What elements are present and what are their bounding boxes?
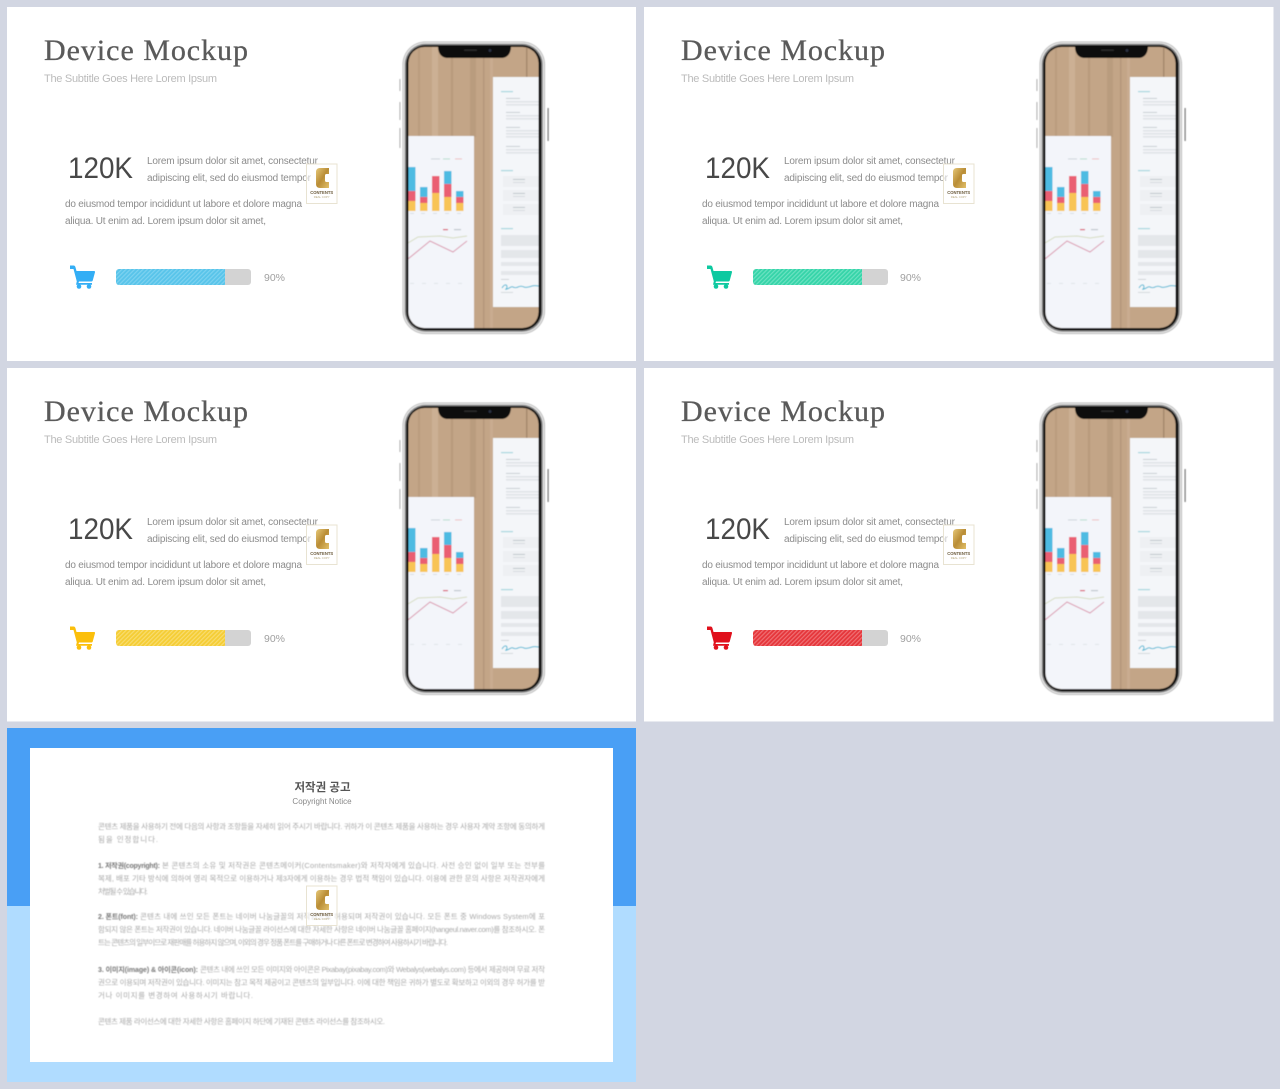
- copyright body text: 함되지 않은 폰트는 저작권이 있습니다. 네이버 나눔글꼴 라이선스에 대한 자세한 사항은 네이버 나눔글꼴 홈페이지(hangeul.naver.com)를 참조하시오. 폰: [98, 924, 545, 934]
- title: Device Mockup: [681, 34, 885, 67]
- body text: [702, 156, 956, 227]
- watermark: REAL COPY: [951, 195, 967, 199]
- statistic: 120K: [705, 513, 770, 546]
- body text: Lorem ipsum dolor sit amet, consectetur: [784, 517, 956, 528]
- watermark: CONTENTS: [310, 190, 333, 195]
- icon: shopping cart: [707, 626, 732, 650]
- body text: Lorem ipsum dolor sit amet, consectetur: [147, 156, 319, 167]
- subtitle: The Subtitle Goes Here Lorem Ipsum: [681, 434, 854, 446]
- copyright heading: 저작권 공고: [294, 780, 351, 794]
- copyright body text: 콘텐츠 내에 쓰인 모든 이미지와 아이콘은 Pixabay(pixabay.com)와 Webalys(webalys.com) 등에서 제공하며 무료 저작: [200, 964, 545, 974]
- body text: adipiscing elit, sed do eiusmod tempor: [784, 173, 949, 184]
- statistic: 120K: [68, 513, 133, 546]
- copyright body text: 3. 이미지(image) & 아이콘(icon):: [98, 965, 198, 974]
- body text: [65, 156, 319, 227]
- watermark: CONTENTS: [947, 190, 970, 195]
- subtitle: The Subtitle Goes Here Lorem Ipsum: [44, 434, 217, 446]
- body text: [65, 517, 319, 588]
- panel: device mockup yellow: [7, 368, 636, 722]
- phone mockup: [400, 402, 549, 695]
- copyright body text: 처벌될 수 있습니다.: [98, 886, 148, 896]
- subtitle: The Subtitle Goes Here Lorem Ipsum: [44, 73, 217, 85]
- phone mockup: [400, 42, 549, 334]
- statistic: 120K: [68, 152, 133, 185]
- panel: device mockup blue: [7, 7, 636, 361]
- subtitle: The Subtitle Goes Here Lorem Ipsum: [681, 73, 854, 85]
- progress bar: [116, 630, 251, 646]
- body text: do eiusmod tempor incididunt ut labore et dolore magna: [65, 199, 302, 210]
- watermark: [944, 525, 974, 564]
- copyright subheading: Copyright Notice: [292, 797, 352, 806]
- title: Device Mockup: [44, 395, 248, 428]
- copyright body text: 콘텐츠 제품 라이선스에 대한 자세한 사항은 홈페이지 하단에 기재된 콘텐츠 라이선스를 참조하시오.: [98, 1016, 385, 1026]
- watermark: CONTENTS: [947, 551, 970, 556]
- body text: adipiscing elit, sed do eiusmod tempor: [147, 534, 312, 545]
- body text: Lorem ipsum dolor sit amet, consectetur: [147, 517, 319, 528]
- copyright body text: [98, 821, 545, 1026]
- body text: do eiusmod tempor incididunt ut labore et dolore magna: [702, 560, 939, 571]
- copyright body text: 거나 이미지를 변경하여 사용하시기 바랍니다.: [98, 990, 253, 1000]
- panel: device mockup green: [644, 7, 1274, 361]
- copyright body text: 본 콘텐츠의 소유 및 저작권은 콘텐츠메이커(Contentsmaker)와 저작자에게 있습니다. 사전 승인 없이 일부 또는 전부를: [162, 860, 545, 870]
- watermark: [944, 164, 974, 204]
- icon: shopping cart: [707, 266, 732, 289]
- progress bar: [753, 630, 888, 646]
- copyright body text: 2. 폰트(font):: [98, 913, 138, 921]
- watermark: [306, 886, 337, 926]
- copyright body text: 콘텐츠 제품을 사용하기 전에 다음의 사항과 조항들을 자세히 읽어 주시기 바랍니다. 귀하가 이 콘텐츠 제품을 사용하는 경우 사용자 계약 조항에 동의하게: [98, 821, 545, 831]
- panel: device mockup red: [644, 368, 1274, 722]
- watermark: [306, 164, 337, 204]
- watermark: CONTENTS: [310, 912, 333, 917]
- copyright body text: 권으로 이용되며 저작권이 있습니다. 이미지는 참고 목적 제공이고 콘텐츠의 일부입니다. 이에 대한 책임은 귀하가 별도로 확보하고 이외의 경우 허가를 받: [98, 977, 545, 987]
- percentage: 90%: [900, 633, 921, 645]
- copyright body text: 복제, 배포 기타 방식에 의하여 영리 목적으로 이용하거나 제3자에게 이용하는 경우 법적 책임이 있습니다. 이용에 관한 문의 사항은 저작권자에게: [98, 873, 545, 883]
- copyright body text: 트는 콘텐츠의 일부이므로 재판매를 허용하지 않으며, 이외의 경우 정품 폰트를 구매하거나 다른 폰트로 변경하여 사용하시기 바랍니다.: [98, 937, 448, 947]
- body text: aliqua. Ut enim ad. Lorem ipsum dolor sit amet,: [702, 577, 903, 588]
- title: Device Mockup: [681, 395, 885, 428]
- copyright body text: 콘텐츠 내에 쓰인 모든 폰트는 네이버 나눔글꼴의 저작권으로 허용되며 저작권이 있습니다. 모든 폰트 중 Windows System에 포: [140, 911, 545, 921]
- phone mockup: [1036, 42, 1186, 334]
- progress bar: [753, 269, 888, 285]
- body text: [702, 517, 956, 588]
- progress bar: [116, 269, 251, 285]
- percentage: 90%: [264, 633, 285, 645]
- watermark: REAL COPY: [314, 195, 330, 199]
- watermark: [306, 525, 337, 564]
- body text: do eiusmod tempor incididunt ut labore et dolore magna: [65, 560, 302, 571]
- body text: adipiscing elit, sed do eiusmod tempor: [147, 173, 312, 184]
- panel: copyright notice: [7, 728, 636, 1082]
- icon: shopping cart: [70, 266, 95, 289]
- watermark: REAL COPY: [951, 556, 967, 560]
- body text: aliqua. Ut enim ad. Lorem ipsum dolor sit amet,: [65, 577, 266, 588]
- body text: adipiscing elit, sed do eiusmod tempor: [784, 534, 949, 545]
- percentage: 90%: [900, 272, 921, 284]
- copyright body text: 1. 저작권(copyright):: [98, 861, 160, 870]
- copyright body text: 됨을 인정합니다.: [98, 834, 158, 844]
- watermark: REAL COPY: [314, 917, 330, 921]
- icon: shopping cart: [70, 626, 95, 650]
- body text: do eiusmod tempor incididunt ut labore et dolore magna: [702, 199, 939, 210]
- watermark: REAL COPY: [314, 556, 330, 560]
- phone mockup: [1036, 402, 1186, 695]
- body text: aliqua. Ut enim ad. Lorem ipsum dolor sit amet,: [702, 216, 903, 227]
- body text: Lorem ipsum dolor sit amet, consectetur: [784, 156, 956, 167]
- watermark: CONTENTS: [310, 551, 333, 556]
- percentage: 90%: [264, 272, 285, 284]
- body text: aliqua. Ut enim ad. Lorem ipsum dolor sit amet,: [65, 216, 266, 227]
- title: Device Mockup: [44, 34, 248, 67]
- statistic: 120K: [705, 152, 770, 185]
